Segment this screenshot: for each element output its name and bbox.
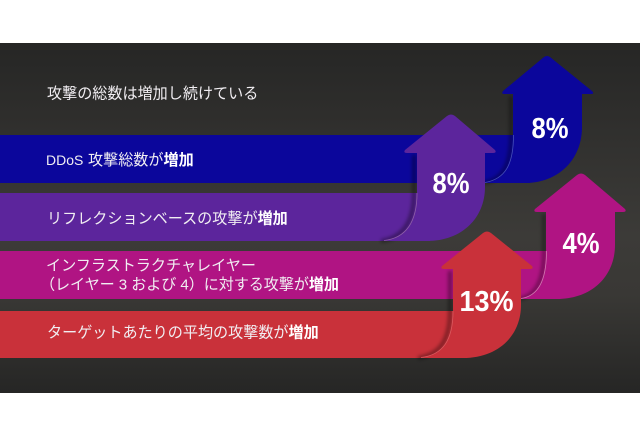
text: DDoS: 増加 — [163, 151, 194, 169]
arrow: DDoS — [0, 56, 593, 183]
arrow: infrastructure — [0, 174, 626, 299]
text: target: ターゲットあたりの平均の攻撃数が増加 — [47, 324, 319, 342]
arrow: reflection — [0, 114, 496, 241]
value: target 13%: 13% — [460, 286, 514, 318]
value: DDoS 8%: 8% — [532, 113, 569, 145]
value: infrastructure 4%: 4% — [562, 228, 600, 260]
text: DDoS: DDoS — [46, 152, 83, 168]
title: 攻撃の総数は増加し続けている — [47, 86, 258, 102]
text: reflection: リフレクションベースの攻撃が増加 — [47, 210, 288, 228]
arrow: target — [0, 232, 533, 358]
text: layers 3 and 4: （レイヤー 3 および 4）に対する攻撃が増加 — [40, 276, 339, 294]
text: infrastructure: インフラストラクチャレイヤー — [46, 258, 256, 274]
text: DDoS: 攻撃総数が — [88, 152, 163, 169]
value: reflection 8%: 8% — [432, 168, 470, 200]
